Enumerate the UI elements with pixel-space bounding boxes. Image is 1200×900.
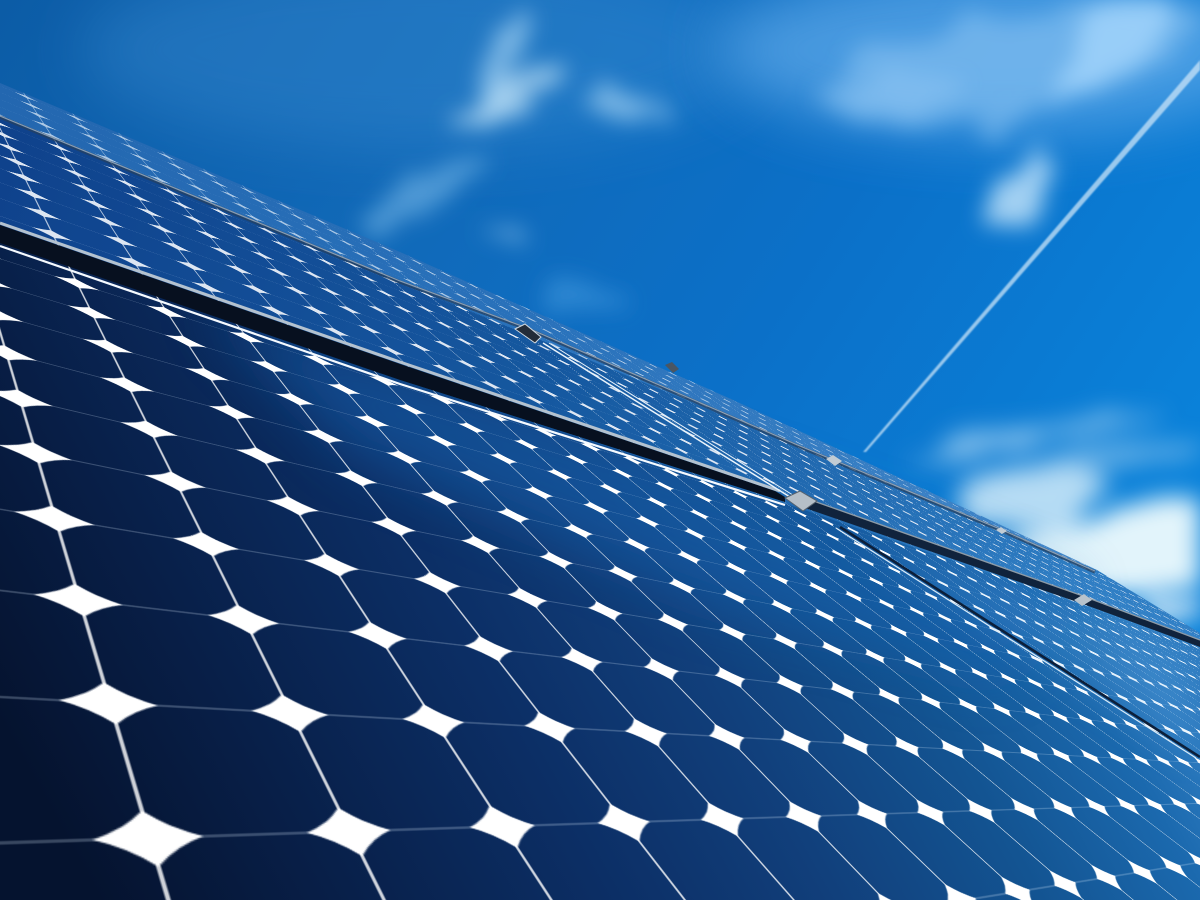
clamp: upper right	[826, 455, 842, 466]
tint: bright right panel	[840, 527, 1200, 757]
lower right clouds	[905, 399, 1200, 621]
thin upper rail	[0, 116, 1095, 572]
tint: upper strip	[0, 83, 1097, 570]
contrail	[863, 60, 1200, 452]
panel seam upper double line	[543, 343, 796, 497]
clamp: upper dark	[515, 324, 541, 343]
clamp: centre	[785, 491, 817, 511]
panel seam lower dark line	[836, 527, 1200, 758]
clamp: far right	[996, 527, 1007, 534]
clamp: top small	[665, 362, 679, 373]
top centre wisps	[352, 4, 666, 312]
main dark rail left section	[0, 223, 785, 505]
clamp: right rail	[1074, 594, 1092, 606]
main dark rail right section	[805, 498, 1200, 647]
top right cloud	[805, 0, 1200, 236]
tint: middle band	[0, 117, 1200, 648]
